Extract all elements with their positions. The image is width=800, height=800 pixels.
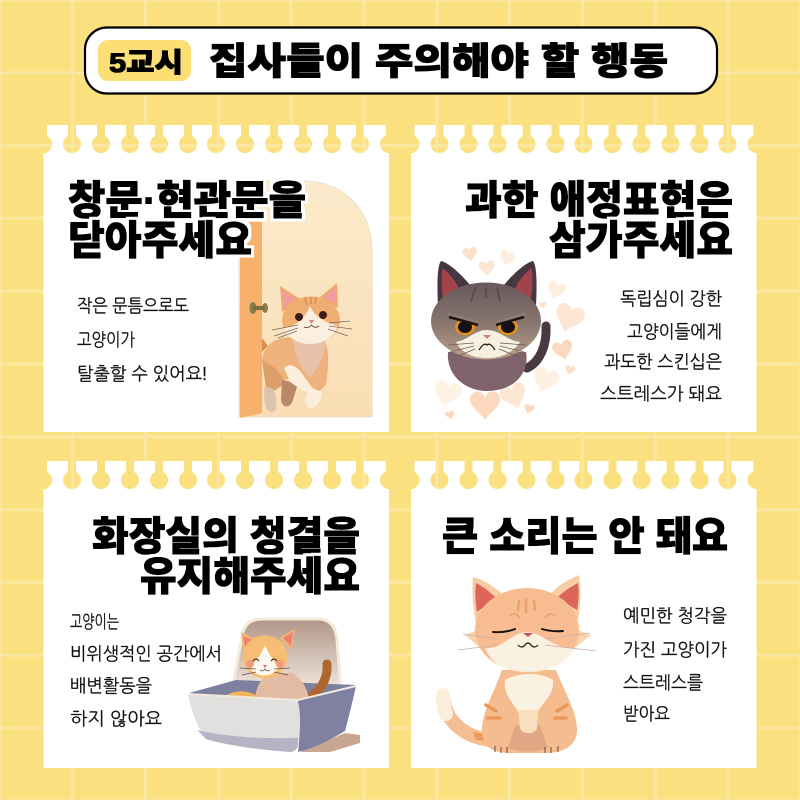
body text: 독립심이 강한 <box>620 289 722 309</box>
paper card 3 <box>44 461 389 768</box>
body text: 배변활동을 <box>70 676 152 696</box>
hearts <box>430 247 587 420</box>
body text: 스트레스가 돼요 <box>600 384 722 404</box>
body text <box>77 296 207 384</box>
body text: 스트레스를 <box>623 673 703 693</box>
lesson badge: 5교시 <box>109 48 183 78</box>
heading: 창문·현관문을 <box>68 179 306 223</box>
heading: 삼가주세요 <box>549 219 733 263</box>
paper card 1 <box>44 125 389 432</box>
body text: 가진 고양이가 <box>623 640 727 660</box>
panel: no loud noises <box>411 461 756 768</box>
illustration: cat in litter box <box>188 619 360 752</box>
body text: 탈출할 수 있어요! <box>77 364 207 384</box>
paper card 4 <box>411 461 756 768</box>
heading <box>92 515 360 599</box>
lesson badge <box>98 40 191 81</box>
illustration: cat squinting at noise <box>443 575 596 753</box>
body text: 예민한 청각을 <box>623 606 727 626</box>
illustration: grumpy cat with hearts <box>430 247 587 420</box>
body text: 하지 않아요 <box>70 709 162 729</box>
body text: 작은 문틈으로도 <box>77 296 189 316</box>
heading: 닫아주세요 <box>68 219 252 263</box>
body text: 비위생적인 공간에서 <box>70 644 222 664</box>
panel: close windows and doors <box>44 125 389 432</box>
body text: 받아요 <box>623 704 670 724</box>
panel: keep the litter box clean <box>44 461 389 768</box>
heading: 화장실의 청결을 <box>92 515 360 559</box>
paper card 2 <box>411 125 756 432</box>
heading: 큰 소리는 안 돼요 <box>442 515 728 559</box>
title bar <box>85 28 717 94</box>
body text: 과도한 스킨십은 <box>604 352 722 372</box>
illustration: cat walking through door <box>239 181 372 418</box>
body text: 고양이들에게 <box>627 322 722 342</box>
body text <box>70 612 222 729</box>
body text <box>623 606 727 724</box>
heading: 과한 애정표현은 <box>465 179 733 223</box>
panel: limit excessive affection <box>411 125 756 432</box>
heading <box>68 179 306 263</box>
main title: 집사들이 주의해야 할 행동 <box>209 41 668 82</box>
heading: 유지해주세요 <box>140 555 360 599</box>
body text: 고양이는 <box>70 612 119 632</box>
body text: 고양이가 <box>77 330 135 350</box>
heading <box>465 179 733 263</box>
body text <box>600 289 722 404</box>
